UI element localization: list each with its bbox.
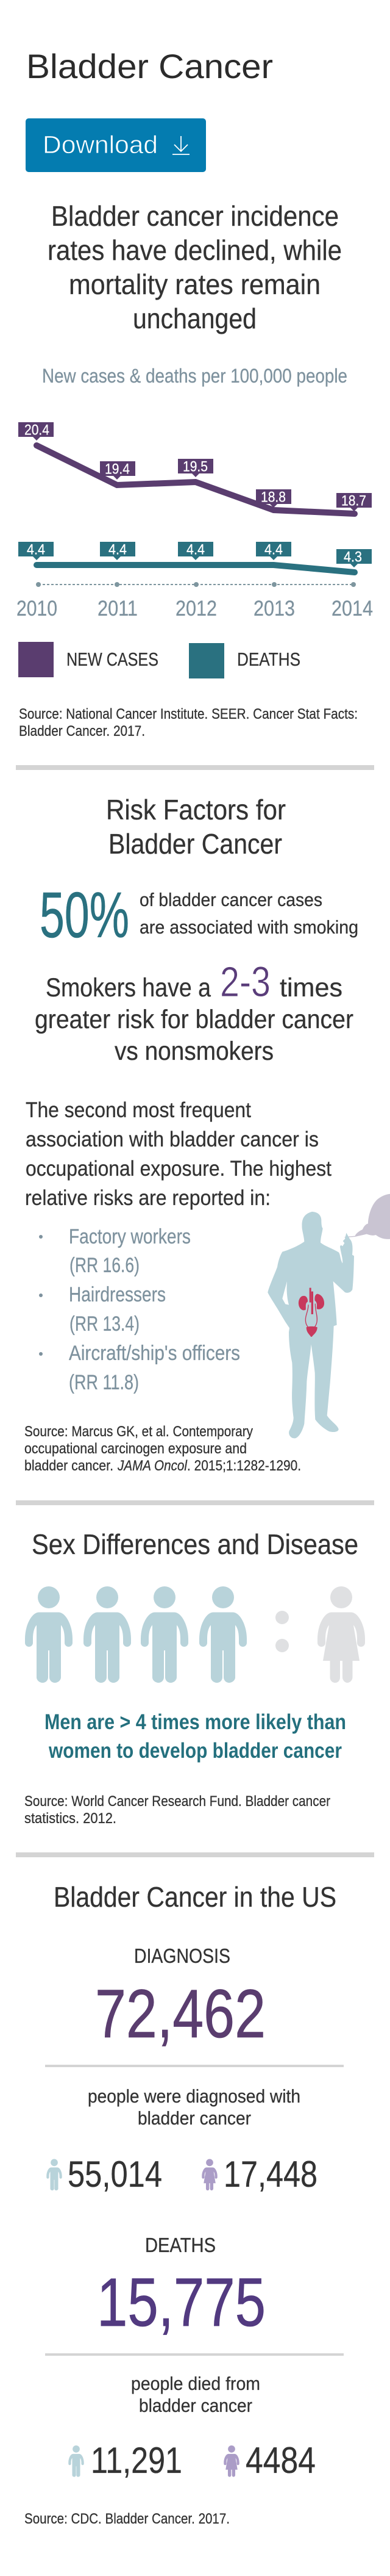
female diagnoses: 17,448: [224, 2154, 317, 2195]
heading: bladder cancer in the US: Bladder Cancer in the US: [54, 1881, 336, 1913]
smoke: [345, 1194, 390, 1239]
diagnosis description: bladder cancer: [138, 2107, 251, 2129]
deaths labels: 4.4: [108, 542, 127, 558]
deaths labels: 4.3: [344, 549, 362, 565]
stat: 50 percent smoking: [40, 879, 358, 951]
new cases labels: [18, 422, 372, 511]
organs: kidneys, ureters and bladder: [299, 1288, 324, 1337]
x axis with years: 2014: [332, 597, 373, 621]
source: sex differences: [24, 1793, 330, 1827]
source: incidence: Bladder Cancer. 2017.: [19, 723, 145, 739]
heading: incidence and mortality: [48, 200, 342, 334]
legend: DEATHS: [237, 649, 300, 670]
stat: 50 percent smoking: 50%: [40, 879, 129, 951]
icon: woman: [317, 1586, 365, 1683]
heading: incidence and mortality: mortality rates remain: [69, 268, 321, 300]
deaths labels: [18, 542, 372, 567]
list: occupations and relative risks: (RR 13.4): [69, 1312, 140, 1336]
new cases labels: 18.7: [341, 493, 366, 509]
heading: incidence and mortality: Bladder cancer incidence: [51, 200, 339, 232]
stat: 50 percent smoking: are associated with smoking: [140, 916, 358, 938]
gap between arm and torso: [282, 1281, 289, 1305]
chart subtitle: New cases & deaths per 100,000 people: [42, 365, 347, 387]
diagnosis description: people were diagnosed with: [88, 2085, 300, 2107]
icon: man 4: [199, 1586, 247, 1683]
new cases labels: 19.4: [105, 461, 130, 477]
source: occupational: Source: Marcus GK, et al. Contemporary: [24, 1423, 253, 1440]
callout: men more likely: women to develop bladder cancer: [48, 1739, 342, 1763]
list: occupations and relative risks: (RR 11.8): [69, 1371, 139, 1394]
icon: man 2: [83, 1586, 131, 1683]
heading: incidence and mortality: unchanged: [133, 303, 257, 334]
icon: man 3: [141, 1586, 188, 1683]
stat: smokers 2-3 times risk: 2-3: [220, 958, 271, 1006]
callout: men more likely: [44, 1710, 346, 1763]
ratio colon: [275, 1611, 289, 1652]
icon: woman: [202, 2159, 218, 2190]
deaths labels: 4.4: [264, 542, 283, 558]
list: occupations and relative risks: Hairdressers: [69, 1283, 166, 1306]
stat: 50 percent smoking: of bladder cancer cases: [140, 889, 322, 910]
new cases labels: 20.4: [24, 422, 49, 438]
illustration: smoking man with urinary organs: [268, 1194, 390, 1438]
source: occupational: JAMA Oncol: [117, 1458, 188, 1474]
source: US statistics: Source: CDC. Bladder Cancer. 2017.: [24, 2511, 230, 2527]
callout: men more likely: Men are > 4 times more likely than: [44, 1710, 346, 1734]
heading: sex differences: Sex Differences and Disease: [32, 1528, 358, 1560]
icon: download arrow: [172, 136, 190, 154]
text: occupational exposure: association with bladder cancer is: [26, 1128, 319, 1151]
pictogram: four men to one woman: [25, 1586, 365, 1683]
female deaths: 4484: [246, 2440, 316, 2481]
text: occupational exposure: occupational exposure. The highest: [26, 1157, 332, 1181]
icon: man: [46, 2159, 62, 2190]
new cases labels: 18.8: [261, 489, 286, 505]
list: occupations and relative risks: Aircraft/ship's officers: [69, 1342, 240, 1365]
x axis with years: [16, 582, 373, 621]
stat: smokers 2-3 times risk: [35, 958, 353, 1066]
diagnosis number: 72,462: [95, 1976, 266, 2052]
panel: diagnosis: [45, 1945, 344, 2195]
deaths description: bladder cancer: [139, 2395, 252, 2416]
icon: man: [68, 2445, 84, 2477]
man silhouette: [268, 1212, 354, 1438]
text: occupational exposure: [25, 1098, 332, 1210]
stat: smokers 2-3 times risk: vs nonsmokers: [115, 1037, 274, 1066]
download button: Download: [43, 131, 158, 159]
deaths number: 15,775: [97, 2264, 266, 2340]
x axis with years: 2010: [16, 597, 57, 621]
title: Bladder Cancer: [26, 47, 273, 85]
stat: smokers 2-3 times risk: times: [280, 973, 342, 1002]
list: occupations and relative risks: [39, 1225, 240, 1394]
new cases line: [37, 445, 355, 514]
deaths label: DEATHS: [145, 2234, 216, 2256]
deaths description: [131, 2373, 260, 2416]
stat: smokers 2-3 times risk: Smokers have a: [46, 973, 211, 1002]
source: occupational: [24, 1423, 301, 1474]
deaths labels: 4.4: [27, 542, 45, 558]
download button: [26, 118, 206, 172]
deaths line: [37, 565, 355, 572]
heading: risk factors: Bladder Cancer: [108, 828, 282, 860]
heading: risk factors: Risk Factors for: [106, 794, 286, 826]
diagnosis label: DIAGNOSIS: [134, 1945, 230, 1967]
heading: incidence and mortality: rates have declined, while: [48, 234, 342, 266]
source: occupational: . 2015;1:1282-1290.: [187, 1458, 301, 1474]
heading: risk factors: [106, 794, 286, 860]
x axis with years: 2012: [176, 597, 217, 621]
list: occupations and relative risks: Factory workers: [69, 1225, 191, 1248]
icon: woman: [224, 2445, 239, 2477]
text: occupational exposure: The second most frequent: [26, 1098, 251, 1122]
stat: smokers 2-3 times risk: greater risk for bladder cancer: [35, 1005, 353, 1034]
male diagnoses: 55,014: [68, 2154, 162, 2195]
source: occupational: bladder cancer.: [24, 1458, 113, 1474]
legend: [18, 642, 300, 678]
text: occupational exposure: relative risks are reported in:: [25, 1186, 271, 1210]
source: sex differences: Source: World Cancer Research Fund. Bladder cancer: [24, 1793, 330, 1810]
deaths labels: 4.4: [186, 542, 205, 558]
source: incidence: [19, 706, 358, 739]
deaths description: people died from: [131, 2373, 260, 2394]
legend: NEW CASES: [66, 649, 158, 670]
x axis with years: 2013: [254, 597, 295, 621]
icon: man 1: [25, 1586, 73, 1683]
new cases labels: 19.5: [183, 459, 208, 475]
x axis with years: 2011: [98, 597, 138, 621]
source: sex differences: statistics. 2012.: [24, 1810, 116, 1827]
male deaths: 11,291: [91, 2440, 182, 2481]
line chart: new cases and deaths: [16, 422, 373, 621]
list: occupations and relative risks: (RR 16.6): [69, 1254, 140, 1277]
source: occupational: occupational carcinogen exposure and: [24, 1441, 247, 1457]
panel: deaths: [45, 2234, 344, 2481]
diagnosis description: [88, 2085, 300, 2129]
